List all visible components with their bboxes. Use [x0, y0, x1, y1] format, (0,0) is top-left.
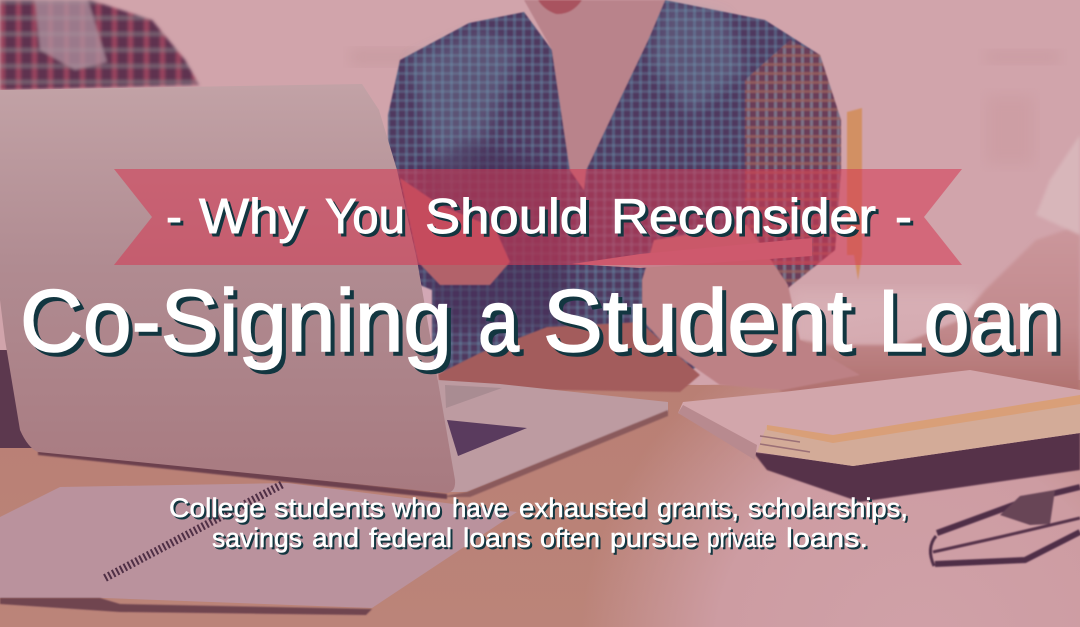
- description: private: [707, 523, 775, 553]
- spiral binding: [105, 484, 283, 578]
- laptop: [0, 84, 668, 499]
- subtitle: -: [166, 190, 182, 244]
- subtitle: Reconsider: [611, 190, 876, 244]
- description: savings: [212, 523, 302, 553]
- description: grants,: [657, 493, 739, 523]
- description: and: [312, 523, 359, 553]
- neck: [524, 0, 665, 190]
- orange frame edge: [847, 108, 862, 280]
- laptop lid: [0, 84, 455, 493]
- subtitle: You: [325, 190, 405, 244]
- pen: [572, 238, 812, 268]
- center person: [388, 0, 841, 372]
- black book cover: [753, 430, 1080, 502]
- dark device at left edge: [0, 350, 36, 448]
- description: College: [169, 493, 265, 523]
- main title: Student: [543, 271, 852, 370]
- main title: Co-Signing: [20, 271, 452, 370]
- subtitle: [166, 190, 912, 244]
- mouth: [538, 0, 582, 14]
- description: pursue: [610, 523, 698, 553]
- left person shirt: [0, 0, 199, 90]
- subtitle: -: [895, 190, 912, 244]
- shirt: [388, 0, 841, 372]
- description: students: [274, 493, 384, 523]
- notebook: [0, 483, 517, 615]
- glasses: [930, 487, 1080, 566]
- table: [0, 380, 1080, 627]
- description: loans.: [786, 523, 868, 553]
- right person arm: [780, 135, 1080, 392]
- hands: [400, 178, 860, 392]
- main title: Loan: [878, 271, 1061, 370]
- description: federal: [369, 523, 452, 553]
- laptop lid shadow: [38, 450, 447, 499]
- description: who: [391, 493, 441, 523]
- description: [169, 493, 908, 553]
- description: scholarships,: [748, 493, 908, 523]
- subtitle: Should: [425, 190, 589, 244]
- description: loans: [463, 523, 531, 553]
- laptop base shadow: [440, 410, 668, 497]
- subtitle: Why: [199, 190, 306, 244]
- ribbon banner: [114, 169, 962, 265]
- open book: [678, 370, 1080, 466]
- description: have: [452, 493, 508, 523]
- laptop base: [430, 380, 668, 492]
- main title: a: [478, 271, 519, 370]
- main title: [20, 271, 1061, 370]
- description: exhausted: [519, 493, 647, 523]
- description: often: [540, 523, 600, 553]
